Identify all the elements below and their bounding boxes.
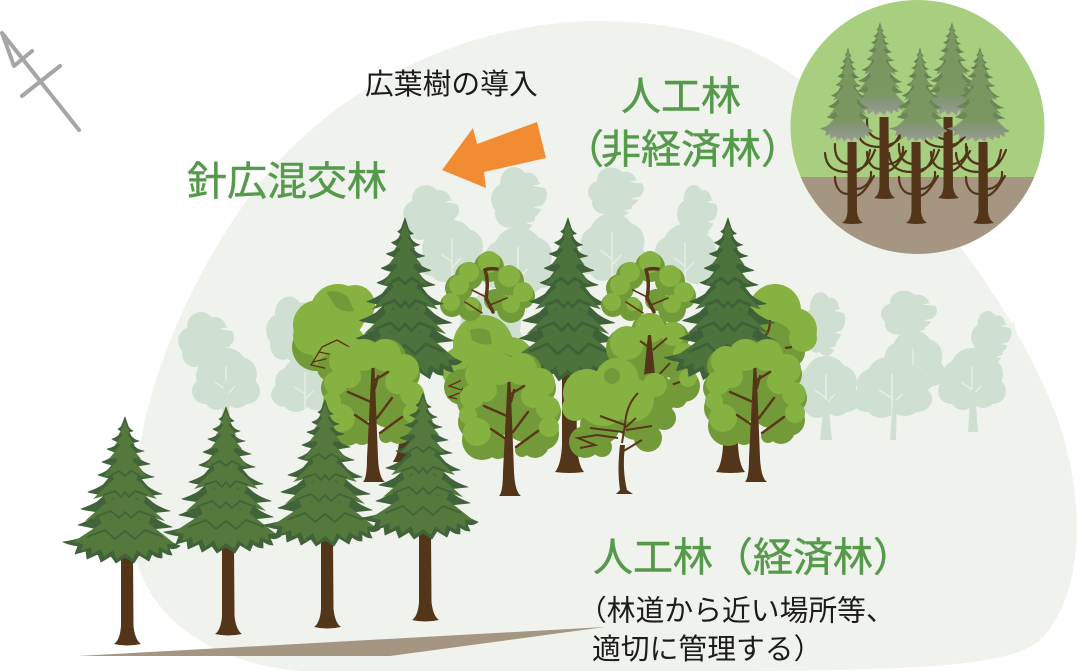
arrow: toward mixed forest — [442, 122, 546, 188]
heading: plantation non-commercial: 人工林 — [621, 75, 741, 119]
heading: non-commercial forest: ） — [761, 128, 801, 172]
label: broadleaf introduction: 広葉樹の導入 — [365, 69, 538, 101]
faded background forest — [175, 167, 1016, 440]
heading: non-commercial forest: （ — [564, 128, 604, 172]
conifer: front row 4 — [361, 393, 478, 622]
ground strip — [78, 627, 605, 656]
broadleaf tree C — [440, 251, 535, 323]
note: management text: （林道から近い場所等、 — [578, 596, 895, 628]
conifer: front row 1 — [63, 417, 180, 646]
broadleaf tree B — [321, 339, 425, 482]
note: management text — [578, 596, 895, 666]
heading: non-commercial forest: 非経済林 — [601, 128, 761, 172]
broadleaf tree E — [441, 315, 535, 409]
broadleaf tree H — [562, 358, 676, 494]
mixed forest: rear broadleaf trees — [292, 251, 817, 409]
note: management text: 適切に管理する） — [592, 634, 822, 666]
conifer: front row 3 — [263, 400, 380, 628]
icon: non-commercial plantation circle — [790, 0, 1046, 255]
faded crowns — [819, 22, 1010, 142]
broadleaf tree J — [703, 339, 807, 482]
bare trunks with branches — [825, 117, 1006, 224]
heading: plantation commercial: 人工林（経済林） — [593, 536, 913, 580]
conifer: front row 2 — [164, 407, 281, 636]
icon: antenna mark — [2, 33, 79, 130]
conifer: right rear — [664, 218, 785, 473]
broadleaf tree D — [457, 353, 561, 496]
conifer: centre rear — [504, 218, 625, 473]
broadleaf tree F and G — [601, 251, 700, 408]
conifer: left rear — [341, 218, 462, 463]
broadleaf tree A — [292, 284, 375, 381]
broadleaf tree I — [746, 284, 817, 369]
heading: mixed forest: 針広混交林 — [187, 160, 387, 204]
